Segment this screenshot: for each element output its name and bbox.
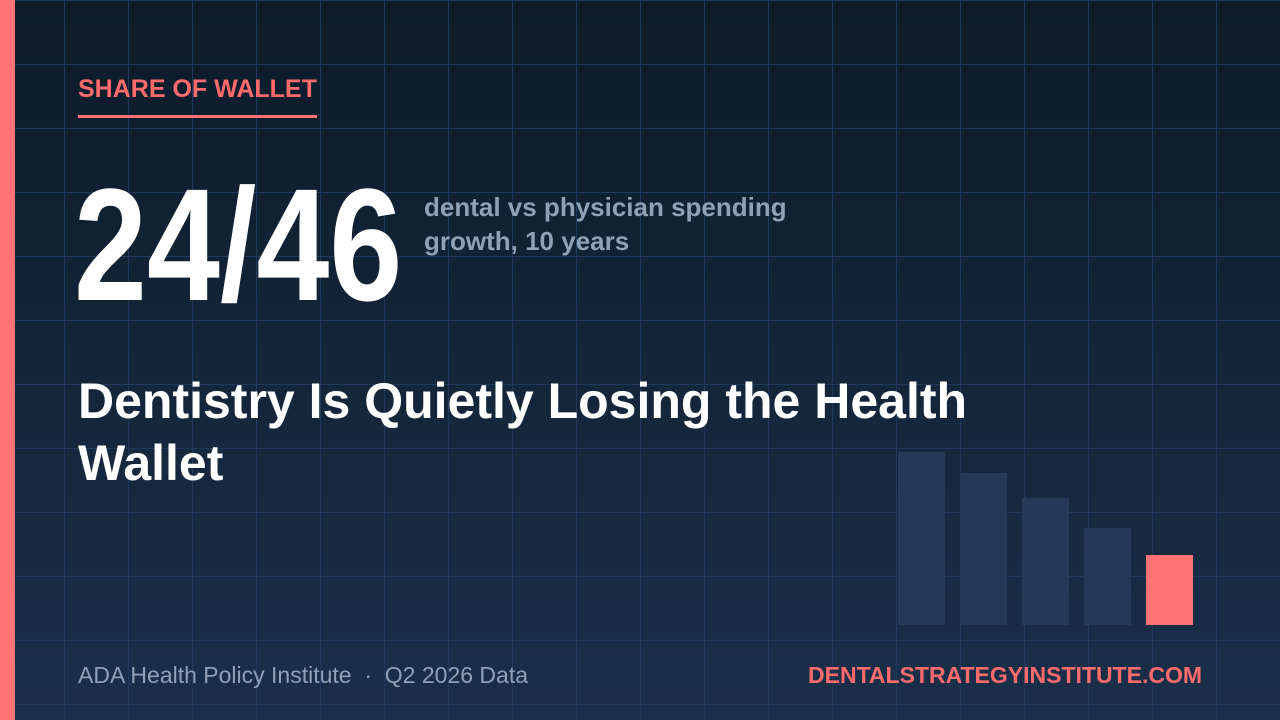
category label: SHARE OF WALLET: [78, 75, 317, 103]
stat description: dental vs physician spending: [424, 192, 787, 222]
stat description: [424, 192, 787, 256]
headline: [78, 373, 967, 491]
headline: Wallet: [78, 435, 223, 491]
accent bar: [0, 0, 15, 720]
bar chart: [898, 452, 1193, 625]
headline: Dentistry Is Quietly Losing the Health: [78, 373, 967, 429]
bar 1: [898, 452, 945, 625]
source note: ADA Health Policy Institute · Q2 2026 Data: [78, 662, 528, 688]
bar 4: [1084, 528, 1131, 625]
bar 3: [1022, 498, 1069, 625]
website: DENTALSTRATEGYINSTITUTE.COM: [808, 662, 1202, 688]
category label: [78, 72, 317, 118]
stat description: growth, 10 years: [424, 226, 629, 256]
bar 5 highlighted: [1146, 555, 1193, 625]
bar 2: [960, 473, 1007, 625]
big stat: 24/46: [74, 155, 402, 334]
